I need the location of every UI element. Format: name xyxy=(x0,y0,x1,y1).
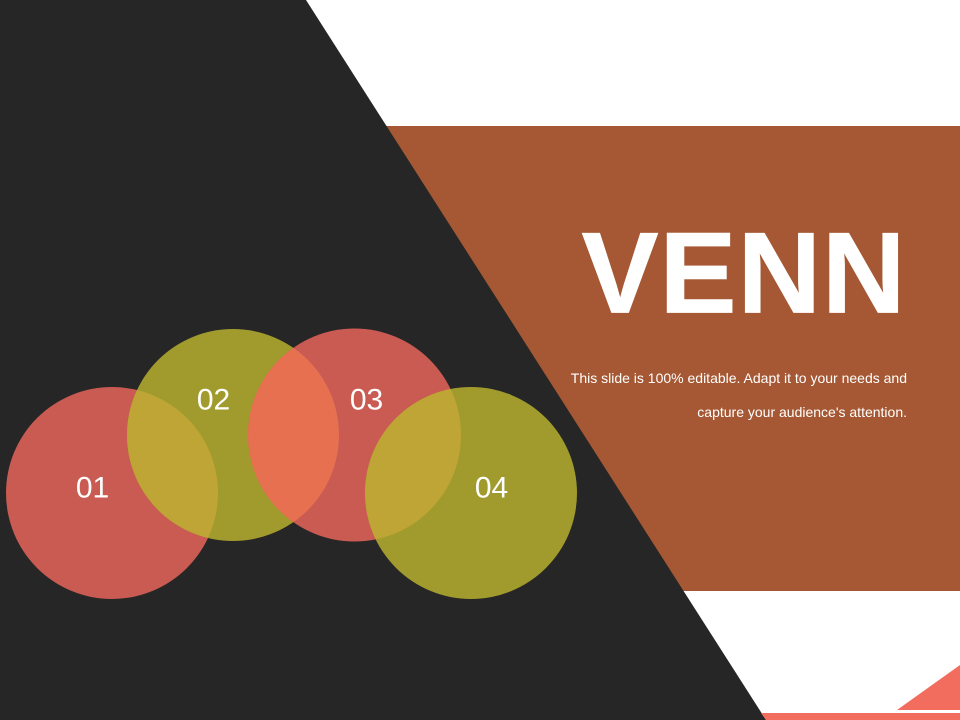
circle 01 xyxy=(6,387,218,599)
label 03: 03 xyxy=(350,384,383,416)
panel: dark diagonal background xyxy=(0,0,766,720)
label 02: 02 xyxy=(197,384,230,416)
text block: description: This slide is 100% editable. Adapt it to your needs and xyxy=(571,370,907,386)
chart: four overlapping venn circles xyxy=(6,328,577,599)
text block: description: capture your audience's attention. xyxy=(697,404,907,420)
heading: VENN title: VENN xyxy=(582,208,906,338)
overlap 03 and 04 xyxy=(365,389,461,540)
shape: coral corner triangle xyxy=(897,665,960,710)
overlap 02 and 03 xyxy=(248,348,339,522)
circle 03 xyxy=(248,328,461,542)
circle 04 xyxy=(365,387,577,599)
label 01: 01 xyxy=(76,472,109,504)
panel: brown title band xyxy=(370,126,960,591)
overlap 01 and 02 xyxy=(127,390,218,538)
circle 02 xyxy=(127,329,339,541)
label 04: 04 xyxy=(475,472,508,504)
bar: coral bottom strip xyxy=(761,713,960,720)
text block: description xyxy=(571,370,907,420)
